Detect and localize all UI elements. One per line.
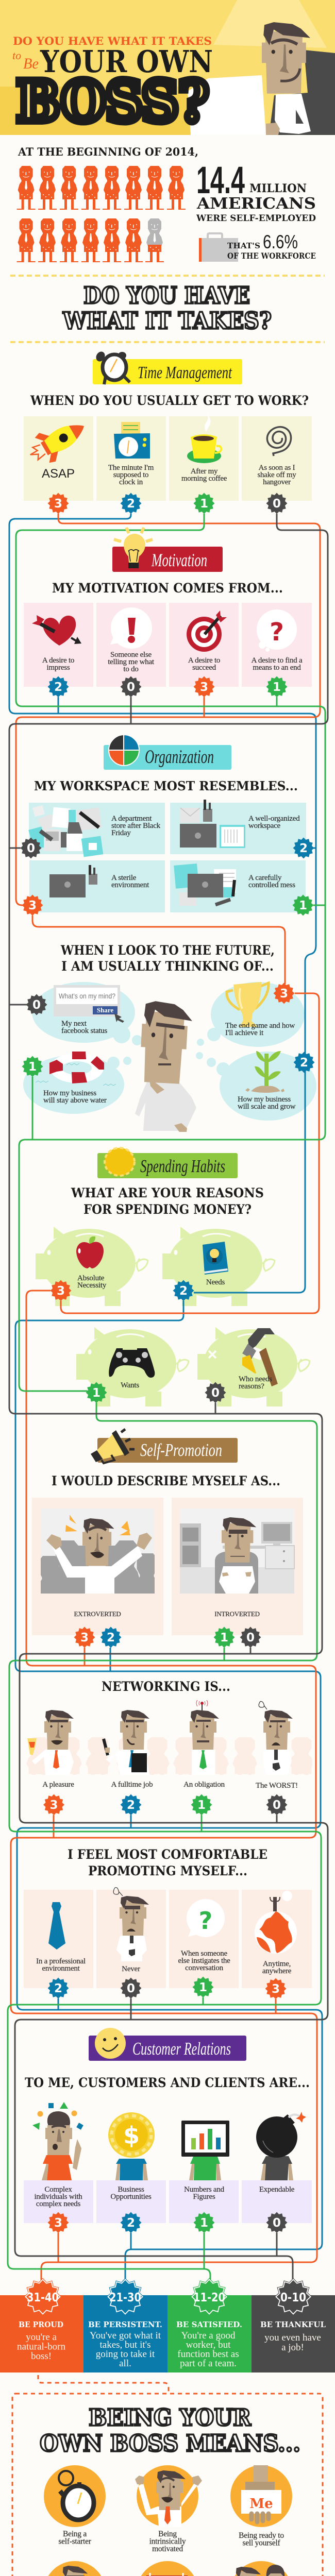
icon: briefcase 6.6 percent	[199, 233, 238, 262]
item: ready to sell yourself: sell yourself	[243, 2539, 281, 2547]
title: boss: BOSS?	[16, 69, 209, 134]
badges: networking	[43, 1794, 288, 1816]
item: manage your time	[137, 2561, 198, 2576]
card: someone else instigates	[169, 1890, 239, 1988]
card: anytime anywhere	[242, 1890, 312, 1988]
card: desire to impress	[24, 603, 93, 687]
result: 11-20 be satisfied: function best as	[177, 2349, 239, 2360]
result: 31-40 be proud: boss!	[31, 2351, 52, 2362]
answer: stay above water lifebuoy: will stay above water	[43, 1096, 107, 1105]
card: the minute: The minute I'm	[108, 464, 154, 472]
question: my motivation comes from: MY MOTIVATION COMES FROM...	[52, 581, 283, 596]
badges: motivation: 1	[273, 681, 281, 694]
answer: stay above water lifebuoy	[36, 1052, 116, 1105]
answer cards: customers	[24, 2102, 312, 2223]
answer: scale and grow plant: How my business	[238, 1095, 291, 1104]
banner: customer relations: Customer Relations	[132, 2039, 231, 2059]
card: someone else telling me	[96, 603, 166, 687]
statistic: 6.6 percent of workforce	[227, 231, 316, 261]
badges: promoting: 3	[272, 1982, 280, 1996]
badges: time management: 1	[200, 497, 208, 511]
card: the minute	[96, 416, 166, 501]
answer: absolute necessity	[47, 1236, 107, 1290]
card: someone else telling me: to do	[123, 665, 139, 673]
result: 11-20 be satisfied: 11-20	[193, 2291, 225, 2304]
badges: organization: 1	[299, 899, 307, 912]
card: sterile: environment	[111, 881, 149, 889]
card: hangover	[242, 416, 312, 501]
answer: absolute necessity: Absolute	[77, 1274, 104, 1282]
dark line: 0 points	[9, 514, 328, 2280]
panel: header	[0, 0, 335, 135]
card: expendable	[242, 2112, 312, 2223]
badges: customers	[47, 2212, 288, 2233]
card: hangover: As soon as I	[259, 464, 295, 472]
card: never	[96, 1888, 166, 1988]
answer: the worst	[256, 1701, 298, 1790]
statistic: 14.4 million americans	[196, 159, 316, 224]
card: after coffee: After my	[191, 467, 217, 476]
result: 0-10 be thankful: BE THANKFUL	[260, 2320, 326, 2329]
card: numbers and figures: Numbers and	[184, 2185, 224, 2194]
answer: the worst: The WORST!	[256, 1782, 298, 1790]
title script: to be: to	[12, 49, 21, 62]
item: ready to sell yourself: Me	[249, 2496, 273, 2512]
card: anytime anywhere: Anytime,	[263, 1960, 291, 1968]
result: 0-10 be thankful: a job!	[281, 2342, 304, 2353]
card: means to an end	[242, 603, 312, 687]
card: someone else instigates: ?	[199, 1907, 212, 1935]
card: numbers and figures: Figures	[193, 2193, 215, 2201]
answer: absolute necessity: Necessity	[77, 1281, 107, 1290]
card: black friday	[28, 803, 165, 857]
section heading: do you have what it takes	[62, 282, 272, 334]
item: self-starter	[44, 2465, 106, 2546]
answer: a pleasure: A pleasure	[42, 1781, 74, 1789]
result: 21-30 be persistent: takes, but it's	[100, 2340, 150, 2350]
badges: spending: 3	[57, 1284, 65, 1298]
badges: customers: 1	[200, 2216, 208, 2230]
card: someone else instigates: conversation	[185, 1964, 224, 1972]
icon: smiley	[95, 2028, 126, 2059]
card: complex individuals: individuals with	[34, 2193, 82, 2201]
badges: spending: 2	[179, 1284, 188, 1298]
card: black friday: Friday	[111, 829, 131, 837]
badges: spending	[51, 1280, 226, 1403]
card: well-organized: A well-organized	[248, 815, 299, 823]
answer: an obligation: An obligation	[183, 1781, 225, 1789]
card: well-organized	[170, 800, 306, 854]
question: comfortable promoting: I FEEL MOST COMFORTABLE	[68, 1847, 267, 1862]
answer: facebook status: facebook status	[61, 1027, 108, 1035]
badges: organization: 2	[299, 842, 308, 855]
card: someone else instigates: else instigates the	[178, 1957, 230, 1965]
title line one: DO YOU HAVE WHAT IT TAKES	[13, 35, 212, 47]
result: 31-40 be proud: BE PROUD	[19, 2320, 63, 2329]
result: 31-40 be proud: you're a	[26, 2332, 57, 2343]
question: when i look to the future: WHEN I LOOK TO THE FUTURE,	[60, 943, 275, 958]
item: intrinsically motivated: motivated	[152, 2545, 183, 2553]
answer: extroverted: EXTROVERTED	[74, 1610, 121, 1618]
answer: wants: Wants	[121, 1381, 139, 1389]
answer: scale and grow plant: will scale and grow	[238, 1103, 296, 1111]
title script: to be	[12, 49, 39, 72]
card: sterile	[29, 860, 165, 912]
result: 21-30 be persistent: going to take it	[96, 2349, 155, 2360]
statistic: 6.6 percent of workforce: THAT'S	[227, 241, 260, 250]
card: desire to succeed	[169, 603, 239, 687]
result: 21-30 be persistent: 21-30	[109, 2291, 141, 2304]
badges: organization	[21, 838, 314, 916]
panel: score results	[0, 2278, 335, 2372]
answer: end game trophy: The end game and how	[225, 1022, 295, 1030]
icon: alarm clock	[94, 350, 130, 384]
statistic: 6.6 percent of workforce: OF THE WORKFORCE	[227, 251, 316, 261]
result: 0-10 be thankful	[252, 2278, 335, 2372]
answer: who needs reasons: Who needs	[239, 1375, 272, 1383]
answer: introverted: INTROVERTED	[214, 1610, 260, 1618]
card: the minute: supposed to	[113, 471, 148, 479]
card: hangover: hangover	[263, 478, 291, 486]
card: after coffee	[169, 414, 239, 501]
card: someone else instigates: When someone	[181, 1950, 227, 1958]
badges: promoting: 0	[127, 1982, 135, 1995]
card: complex individuals: complex needs	[36, 2200, 81, 2208]
answer: facebook status: Share	[97, 1006, 113, 1014]
badges: future: 1	[28, 1060, 37, 1074]
pictogram: fifteen people	[17, 166, 186, 262]
result: 31-40 be proud	[0, 2278, 83, 2372]
question: reasons for spending money: FOR SPENDING MONEY?	[83, 1202, 252, 1217]
question: networking is: NETWORKING IS...	[102, 1679, 230, 1694]
badges: motivation	[47, 676, 288, 698]
banner: self-promotion	[91, 1429, 238, 1463]
answer: needs: Needs	[206, 1278, 225, 1286]
result: 11-20 be satisfied: part of a team.	[180, 2358, 237, 2369]
heading: being your own boss means: OWN BOSS MEANS...	[40, 2430, 300, 2457]
banner: time management	[93, 350, 242, 384]
answer cards: promoting	[24, 1888, 312, 1988]
result: 0-10 be thankful: 0-10	[280, 2291, 306, 2304]
blue line: 2 points	[9, 514, 322, 2280]
card: expendable: Expendable	[259, 2185, 295, 2194]
title: your own: YOUR OWN	[40, 44, 213, 79]
answer: needs	[174, 1242, 228, 1286]
item: self-starter: Being a	[63, 2530, 87, 2538]
result: 31-40 be proud: 31-40	[27, 2291, 59, 2304]
green line: 1 point	[8, 514, 325, 2280]
section heading: do you have what it takes: DO YOU HAVE	[83, 282, 250, 309]
answer: who needs reasons: reasons?	[239, 1382, 264, 1391]
badges: customers: 0	[273, 2216, 281, 2230]
scoring connector lines	[8, 514, 328, 2280]
badges: future: 0	[32, 998, 41, 1012]
result: 0-10 be thankful: you even have	[264, 2332, 321, 2343]
heading: being your own boss means	[40, 2404, 300, 2457]
answer cards: time management	[23, 412, 312, 501]
badges: networking: 3	[49, 1799, 58, 1812]
card: means to an end: A desire to find a	[252, 656, 302, 665]
illustration: thinking man	[135, 1001, 196, 1132]
card: black friday: A department	[111, 815, 152, 823]
banner: customer relations	[89, 2028, 246, 2061]
icon: light bulb	[114, 528, 153, 568]
badges: networking: 0	[273, 1799, 281, 1812]
icon: megaphone	[91, 1429, 135, 1463]
badges: self-promotion: 2	[107, 1631, 115, 1645]
question: when i look to the future	[60, 943, 275, 974]
card: anytime anywhere: anywhere	[262, 1967, 292, 1975]
statistic: 14.4 million americans: AMERICANS	[196, 195, 316, 213]
badges: promoting: 1	[199, 1981, 207, 1994]
result: 21-30 be persistent: all.	[119, 2358, 131, 2369]
card: business opportunities: $	[123, 2122, 140, 2149]
badges: spending: 0	[211, 1386, 220, 1400]
question: describe myself: I WOULD DESCRIBE MYSELF AS...	[52, 1473, 280, 1488]
badges: time management	[47, 493, 288, 514]
answer: a pleasure	[27, 1710, 74, 1789]
card: asap	[23, 412, 93, 501]
badges: networking: 2	[127, 1799, 135, 1812]
card: the minute: clock in	[119, 478, 143, 486]
answer: stay above water lifebuoy: How my business	[43, 1089, 96, 1097]
badges: promoting: 2	[54, 1982, 62, 1995]
answer: end game trophy	[225, 982, 295, 1037]
badges: spending: 1	[92, 1386, 100, 1400]
card: desire to impress: A desire to	[42, 656, 74, 665]
answer: who needs reasons	[209, 1328, 278, 1391]
card: well-organized: workspace	[248, 822, 280, 830]
item: ready to sell yourself	[230, 2465, 292, 2547]
badges: networking: 1	[197, 1799, 206, 1812]
statistic: 14.4 million americans: WERE SELF-EMPLOYED	[196, 213, 316, 224]
card: never: Never	[122, 1965, 140, 1973]
answer: a fulltime job	[104, 1710, 153, 1789]
illustration: man reading paper in chair	[188, 22, 335, 135]
question: comfortable promoting: PROMOTING MYSELF...	[88, 1863, 247, 1878]
card: business opportunities	[96, 2112, 166, 2223]
question: customers and clients: TO ME, CUSTOMERS AND CLIENTS ARE...	[25, 2075, 310, 2090]
answer cards: organization	[28, 800, 306, 912]
question: reasons for spending money	[71, 1185, 264, 1217]
banner: self-promotion: Self-Promotion	[140, 1440, 222, 1460]
card: means to an end: means to an end	[253, 664, 301, 672]
pig bodies	[36, 1227, 310, 1406]
card: hangover: shake off my	[257, 471, 296, 479]
answer: end game trophy: I'll achieve it	[225, 1029, 264, 1037]
item: ready to sell yourself: Being ready to	[239, 2531, 284, 2540]
item: valuing every customer	[230, 2561, 292, 2576]
result: 21-30 be persistent	[83, 2278, 167, 2372]
section heading: do you have what it takes: WHAT IT TAKES?	[62, 307, 272, 334]
badges: time management: 3	[54, 497, 62, 511]
badges: customers: 2	[127, 2216, 135, 2230]
card: numbers and figures	[169, 2121, 239, 2223]
banner: motivation: Motivation	[151, 550, 207, 570]
card: sterile: A sterile	[111, 874, 136, 882]
banner: organization	[104, 735, 231, 770]
orange line: 3 points	[11, 514, 320, 2280]
card: business opportunities: Business	[118, 2185, 144, 2194]
badges: motivation: 0	[127, 681, 135, 694]
badges: motivation: 2	[54, 681, 62, 694]
badges: time management: 0	[273, 497, 281, 511]
result: 11-20 be satisfied: You're a good	[181, 2330, 235, 2341]
banner: motivation	[112, 528, 223, 572]
answer: introverted	[172, 1498, 303, 1635]
badges: motivation: 3	[200, 681, 208, 694]
dashed connector to summary	[38, 2375, 169, 2394]
item: intrinsically motivated: intrinsically	[149, 2537, 186, 2546]
question: reasons for spending money: WHAT ARE YOUR REASONS	[71, 1185, 264, 1200]
answer: scale and grow plant	[238, 1051, 296, 1111]
card: controlled mess	[170, 860, 306, 912]
item: self-starter: self-starter	[58, 2537, 92, 2546]
badges: time management: 2	[127, 497, 135, 511]
crowd silhouette	[26, 1737, 312, 1775]
banner: time management: Time Management	[138, 363, 232, 382]
card: business opportunities: Opportunities	[110, 2193, 152, 2201]
heading: being your own boss means: BEING YOUR	[89, 2404, 252, 2431]
card: professional: In a professional	[36, 1957, 86, 1965]
result: 11-20 be satisfied: worker, but	[186, 2340, 231, 2350]
card: controlled mess: A carefully	[248, 874, 281, 882]
card: professional	[24, 1890, 93, 1988]
card: complex individuals	[24, 2102, 93, 2223]
badges: organization: 3	[28, 899, 37, 912]
card: after coffee: morning coffee	[181, 474, 227, 483]
banner: spending habits: Spending Habits	[140, 1156, 225, 1176]
title script: to be: Be	[23, 55, 39, 72]
answer cards: motivation	[24, 603, 312, 687]
card: black friday: store after Black	[111, 822, 161, 830]
question: comfortable promoting	[68, 1847, 267, 1878]
badges: future	[22, 983, 314, 1077]
statistic: 14.4 million americans: MILLION	[249, 182, 307, 195]
result: 21-30 be persistent: You've got what it	[90, 2330, 161, 2341]
result: 11-20 be satisfied	[167, 2278, 252, 2372]
icon: coin	[105, 1148, 135, 1176]
card: desire to succeed: A desire to	[188, 656, 220, 665]
item: intrinsically motivated: Being	[158, 2530, 177, 2538]
question: when do you usually get to work: WHEN DO YOU USUALLY GET TO WORK?	[30, 393, 309, 408]
answer: a fulltime job: A fulltime job	[111, 1781, 153, 1789]
card: desire to impress: impress	[47, 664, 70, 672]
answer: wants	[88, 1348, 155, 1389]
card: means to an end: ?	[270, 618, 284, 647]
card: complex individuals: Complex	[44, 2185, 72, 2194]
item: intrinsically motivated	[135, 2465, 202, 2553]
statistic: 6.6 percent of workforce: 6.6%	[263, 231, 298, 252]
card: asap: ASAP	[42, 467, 75, 481]
badges: future: 3	[280, 987, 288, 1001]
statistic: 14.4 million americans: 14.4	[196, 159, 245, 201]
item: balancing energy	[44, 2561, 106, 2576]
badges: self-promotion	[74, 1627, 261, 1648]
result: 31-40 be proud: natural-born	[17, 2341, 65, 2352]
answer: facebook status: My next	[61, 1020, 87, 1028]
badges: promoting	[47, 1976, 287, 1999]
card: professional: environment	[42, 1964, 80, 1973]
result: 21-30 be persistent: BE PERSISTENT.	[88, 2320, 162, 2329]
badges: future: 2	[300, 1056, 308, 1070]
card: someone else telling me: telling me what	[108, 658, 155, 666]
panel: being your own boss means	[12, 2394, 323, 2576]
answer: an obligation	[183, 1700, 225, 1789]
answer: facebook status: What's on my mind?	[59, 992, 115, 1000]
statistic heading: AT THE BEGINNING OF 2014,	[18, 145, 198, 158]
badges: customers: 3	[54, 2216, 62, 2230]
icon: puzzle circle	[109, 735, 139, 766]
badges: organization: 0	[27, 842, 35, 855]
banner: organization: Organization	[145, 747, 214, 768]
answer: extroverted	[32, 1498, 163, 1635]
question: when i look to the future: I AM USUALLY THINKING OF...	[61, 959, 274, 974]
card: someone else telling me: Someone else	[110, 651, 152, 659]
card: desire to succeed: succeed	[192, 664, 216, 672]
badges: self-promotion: 3	[80, 1631, 89, 1645]
banner: spending habits	[97, 1148, 238, 1178]
card: controlled mess: controlled mess	[248, 881, 295, 889]
badges: self-promotion: 1	[220, 1631, 228, 1645]
question: my workspace most resembles: MY WORKSPACE MOST RESEMBLES...	[34, 778, 298, 793]
answer: facebook status	[54, 985, 124, 1035]
thought bubbles	[23, 982, 316, 1121]
badges: self-promotion: 0	[246, 1631, 255, 1645]
result: 11-20 be satisfied: BE SATISFIED.	[176, 2320, 242, 2329]
